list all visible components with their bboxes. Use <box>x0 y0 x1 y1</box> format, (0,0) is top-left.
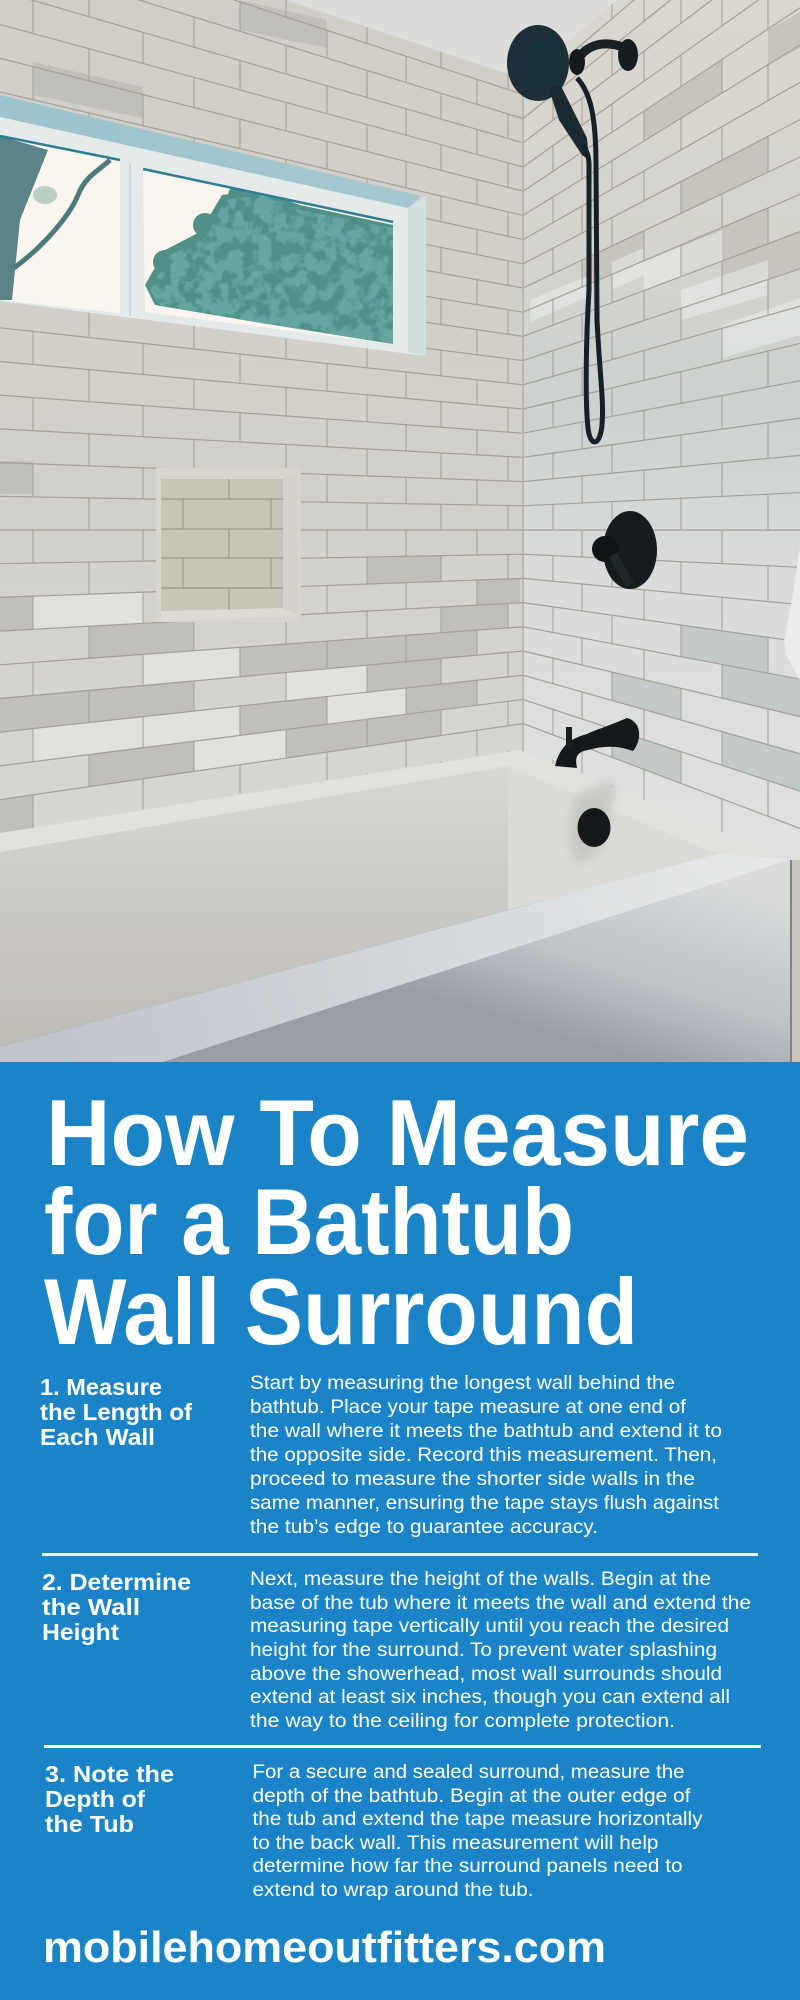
photo: tiled bathtub alcove <box>0 0 800 1062</box>
tub back rim <box>0 750 790 859</box>
step 3 text <box>252 1762 703 1901</box>
website footer: mobilehomeoutfitters.com <box>43 1923 606 1972</box>
overflow drain cover <box>578 808 610 847</box>
step 1 text: the opposite side. Record this measurement. Then, <box>250 1445 717 1466</box>
tub basin interior <box>0 766 588 1047</box>
step 1 heading: the Length of <box>40 1399 192 1425</box>
title: for a Bathtub <box>44 1169 574 1274</box>
step 3 heading <box>45 1761 174 1837</box>
step 3 text: to the back wall. This measurement will help <box>252 1833 658 1854</box>
window frame <box>0 117 426 356</box>
step 1 heading: 1. Measure <box>40 1374 162 1400</box>
step 3 text: For a secure and sealed surround, measure the <box>252 1762 684 1783</box>
step 1 text: bathtub. Place your tape measure at one end of <box>250 1397 687 1418</box>
step 1 text: same manner, ensuring the tape stays flush against <box>250 1493 720 1514</box>
shower hose <box>577 78 603 442</box>
ceiling <box>286 0 617 79</box>
tub spout <box>555 718 639 768</box>
step 2 heading: Height <box>42 1619 119 1645</box>
step 1 text: proceed to measure the shorter side walls in the <box>250 1469 695 1490</box>
step 1 text: the wall where it meets the bathtub and extend it to <box>250 1421 722 1442</box>
step 1 text <box>250 1373 722 1538</box>
step 2 text: above the showerhead, most wall surrounds should <box>250 1664 722 1685</box>
window <box>0 95 426 356</box>
shower head <box>507 25 638 160</box>
shower valve <box>592 511 657 589</box>
tile grout lines <box>0 0 800 860</box>
spout shadow <box>568 780 616 866</box>
step 3 heading: Depth of <box>45 1786 145 1812</box>
step 2 text: measuring tape vertically until you reach the desired <box>250 1616 729 1637</box>
spout knob <box>566 727 572 747</box>
step 3 text: determine how far the surround panels need to <box>252 1856 682 1877</box>
right tiled wall <box>523 0 800 900</box>
step 2 text: extend at least six inches, though you can extend all <box>250 1687 730 1708</box>
step 3 text: the tub and extend the tape measure horizontally <box>252 1809 703 1830</box>
step 2 heading: the Wall <box>42 1594 140 1620</box>
step 2 text: height for the surround. To prevent water splashing <box>250 1640 717 1661</box>
step 3 text: depth of the bathtub. Begin at the outer edge of <box>252 1786 691 1807</box>
title: Wall Surround <box>44 1259 638 1364</box>
step 2 text: the way to the ceiling for complete protection. <box>250 1711 675 1732</box>
step 3 heading: the Tub <box>45 1811 134 1837</box>
step 3 heading: 3. Note the <box>45 1761 174 1787</box>
step 2 text: Next, measure the height of the walls. Begin at the <box>250 1569 711 1590</box>
left glass pane with tree trunk <box>0 137 120 313</box>
bathtub <box>0 750 800 1062</box>
step 1 heading: Each Wall <box>40 1424 155 1450</box>
step 2 heading: 2. Determine <box>42 1569 191 1595</box>
title <box>44 1080 749 1364</box>
right glass pane with tree foliage <box>140 165 400 350</box>
tub front rim <box>0 854 790 1062</box>
step 2 heading <box>42 1569 191 1645</box>
step 1 heading <box>40 1374 192 1450</box>
towel <box>784 547 800 680</box>
recessed wall niche <box>156 468 301 622</box>
window pane edges <box>0 136 393 222</box>
tub apron <box>164 886 790 1062</box>
title: How To Measure <box>46 1080 749 1185</box>
step 2 text: base of the tub where it meets the wall and extend the <box>250 1593 751 1614</box>
step 3 text: extend to wrap around the tub. <box>252 1880 534 1901</box>
step 1 text: the tub’s edge to guarantee accuracy. <box>250 1517 598 1538</box>
left tiled wall <box>0 0 524 860</box>
tile strip right of tub <box>792 860 800 1062</box>
step 1 text: Start by measuring the longest wall behind the <box>250 1373 675 1394</box>
window top tile trim <box>0 95 421 208</box>
step 2 text <box>250 1569 751 1732</box>
blue text panel <box>0 1062 800 2000</box>
